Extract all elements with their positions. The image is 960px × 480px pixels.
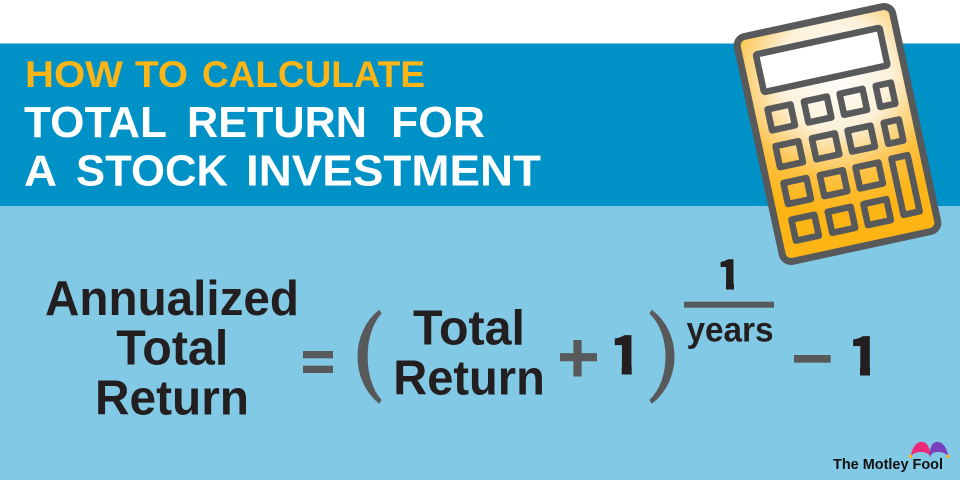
minus sign [794,355,831,363]
right parenthesis [650,310,674,403]
wordmark: The Motley Fool [833,457,943,473]
label: annualized total return: Total [116,322,228,376]
calculator buttons [768,82,920,241]
label: annualized total return: Annualized [45,272,299,326]
equals sign [303,351,333,373]
plus sign [560,340,597,376]
exponent fraction [684,259,774,349]
heading line: how to calculate [25,54,425,95]
calculator screen [756,28,888,92]
heading line: how to calculate: CALCULATE [202,54,425,95]
panel: formula background [0,206,960,480]
heading line: how to calculate: TO [135,54,188,95]
heading line: how to calculate: HOW [25,54,123,95]
formula [46,259,870,415]
heading line: a stock investment: INVESTMENT [246,146,541,196]
icon: calculator [735,5,940,263]
heading line: a stock investment [24,146,541,196]
term: total return: Return [393,352,545,406]
heading line: a stock investment: A [24,146,57,196]
jester hat icon [909,442,950,458]
heading [24,54,541,196]
final one: 1 [848,315,880,391]
logo: The Motley Fool [833,442,950,473]
label: annualized total return [45,272,299,426]
numerator: 1 [717,241,741,301]
heading line: total return for [24,98,485,147]
left parenthesis [358,310,381,403]
fraction bar [684,302,774,308]
denominator: years [686,311,774,350]
heading line: total return for: RETURN [187,98,367,147]
heading line: total return for: TOTAL [24,98,167,147]
label: annualized total return: Return [95,372,249,426]
term: total return [393,302,545,406]
panel: header band [0,44,960,206]
term: total return: Total [413,302,525,356]
heading line: total return for: FOR [391,98,485,147]
number one: 1 [610,314,641,390]
calculator body [735,5,940,263]
heading line: a stock investment: STOCK [76,146,228,196]
